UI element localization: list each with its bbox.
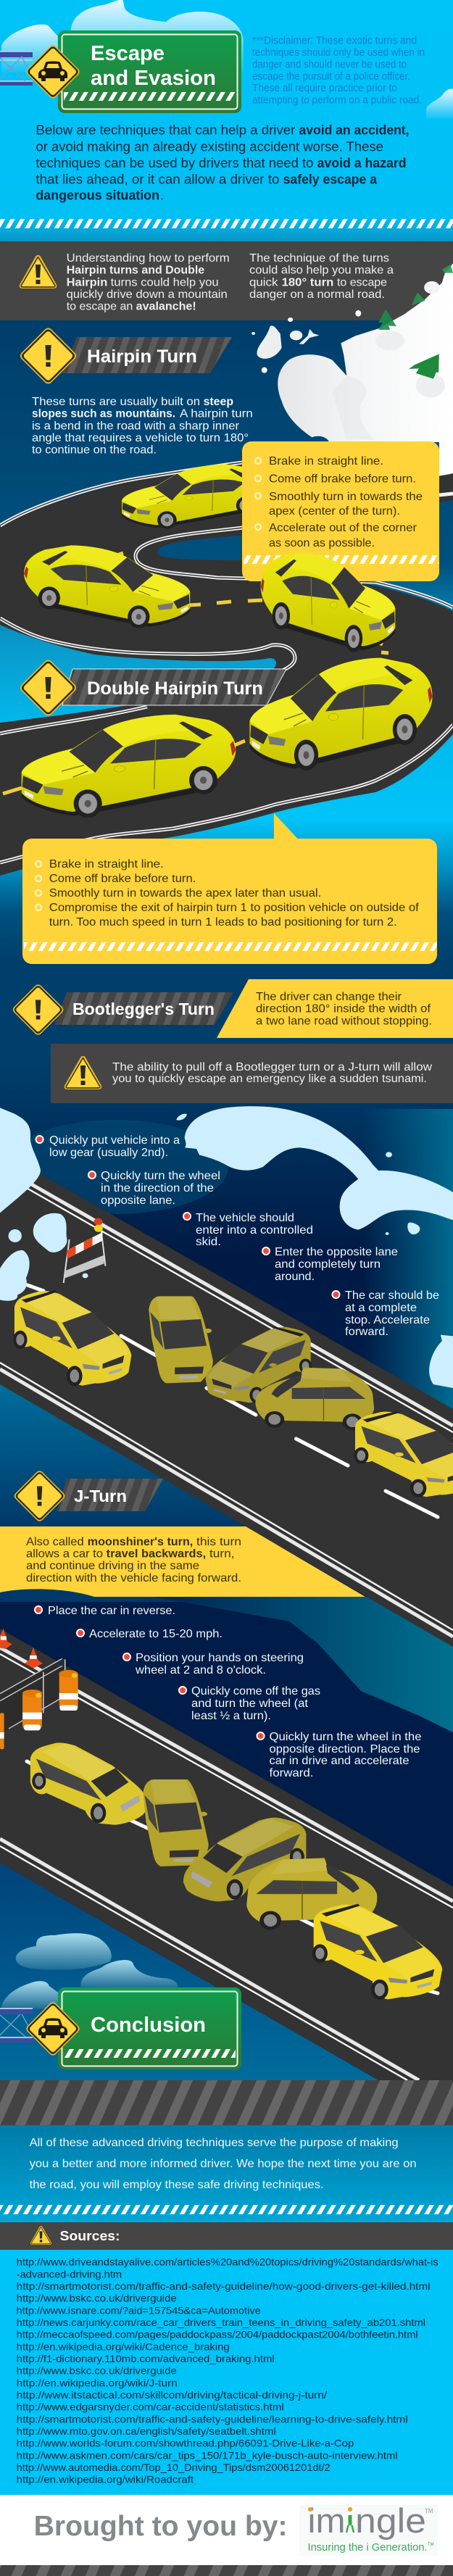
icon: car road sign (25, 2000, 81, 2057)
icon: cones, barrels and gate (0, 1629, 78, 1749)
car: step 1 (13, 1290, 131, 1386)
intro paragraph: or avoid making an already existing accident worse. These (36, 138, 383, 154)
car: lower-left sedan on hairpin (24, 545, 190, 628)
hairpin gap two (0, 625, 276, 723)
heading: Sources: Sources: (59, 2229, 120, 2243)
car: step 3 (183, 1818, 306, 1901)
intro paragraph: Below are techniques that can help a driver (36, 122, 295, 138)
heading: J-Turn: J-Turn (74, 1487, 127, 1505)
intro paragraph (36, 122, 409, 203)
callout: hairpin steps: Accelerate out of the corner (269, 522, 417, 534)
hairpin background (0, 320, 453, 964)
steps: J-turn (35, 1605, 422, 1779)
car: step 2 (149, 1296, 213, 1383)
steps: J-turn: Quickly turn the wheel in the (270, 1731, 422, 1743)
panel: sources list: http://en.wikipedia.org/wiki/J-turn (17, 2377, 178, 2388)
panel: sources list: http://www.isnare.com/?aid=157545&ca=Automotive (17, 2304, 261, 2316)
text: hairpin description: steep (204, 396, 233, 408)
callout: J-turn description: allows a car to (26, 1548, 103, 1560)
callout: J-turn description: this turn (196, 1536, 241, 1548)
disclaimer text (252, 36, 425, 107)
panel: avalanche warning: to escape an (67, 301, 133, 313)
steps: bootlegger turn: low gear (usually 2nd). (49, 1147, 168, 1159)
icon: warning diamond (13, 1469, 67, 1523)
panel: sources list: http://www.driveandstayalive.com/articles%20and%20topics/driving%20standards/what-is (17, 2256, 439, 2268)
callout: J-turn description: moonshiner's turn, (88, 1536, 193, 1548)
title sign: Conclusion: Conclusion (91, 2014, 206, 2037)
panel: sources list: http://meccaofspeed.com/pages/paddockpass/2004/paddockpast2004/bothfeetin.html (17, 2329, 418, 2340)
callout: double hairpin steps: Smoothly turn in towards the apex later than usual. (49, 887, 321, 899)
icon: conclusion gantry struts (0, 2008, 33, 2043)
footer: brought to you by (0, 2495, 453, 2565)
heading: Hairpin Turn (18, 326, 232, 386)
text: hairpin description: to continue on the road. (32, 444, 157, 457)
disclaimer text: escape the pursuit of a police officer. (252, 71, 410, 83)
intro paragraph: safely escape a (283, 171, 378, 186)
panel: avalanche warning: danger on a normal road. (249, 288, 385, 301)
intro paragraph: . (160, 188, 164, 203)
logo: imingle: im (307, 2501, 345, 2540)
heading: J-Turn (13, 1469, 163, 1523)
panel: avalanche warning: Hairpin turns and Double (67, 265, 204, 277)
intro paragraph: dangerous situation (36, 188, 159, 203)
panel: avalanche warning: could also help you make a (249, 265, 394, 277)
callout: hairpin steps: as soon as possible. (269, 537, 375, 549)
title sign: Escape and Evasion: and Evasion (91, 67, 216, 90)
steps: J-turn: least ½ a turn). (191, 1710, 271, 1722)
steps: bootlegger turn: forward. (345, 1326, 388, 1338)
logo: imingle (299, 2501, 438, 2556)
panel: sources list: http://www.mto.gov.on.ca/english/safety/seatbelt.shtml (17, 2425, 276, 2437)
title sign: Conclusion (58, 1987, 241, 2070)
icon: warning triangle (30, 2226, 51, 2245)
disclaimer text: danger and should never be used to (252, 59, 407, 70)
title sign: Escape and Evasion (58, 30, 241, 113)
steps: J-turn: Quickly come off the gas (191, 1685, 320, 1698)
panel: sources list: http://www.askmen.com/cars/car_tips_150/171b_kyle-busch-auto-interview.html (17, 2449, 398, 2461)
title sign: Escape and Evasion: Escape (91, 42, 165, 65)
text: hairpin description: slopes such as mountains. (32, 408, 175, 420)
icon: car road sign (25, 43, 81, 100)
text: hairpin description: A hairpin turn (180, 408, 253, 420)
steps: bootlegger turn: The vehicle should (196, 1212, 294, 1224)
callout: double hairpin steps (22, 813, 437, 964)
panel: sources list: http://en.wikipedia.org/wiki/Roadcraft (17, 2474, 194, 2485)
icon: warning triangle (20, 255, 57, 288)
steps: J-turn: car in drive and accelerate (270, 1755, 410, 1767)
steps: J-turn: Accelerate to 15-20 mph. (89, 1628, 223, 1640)
steps: J-turn: and turn the wheel (at (191, 1698, 309, 1710)
steps: bootlegger turn: enter into a controlled (196, 1224, 313, 1237)
disclaimer text: ***Disclaimer: These exotic turns and (252, 36, 417, 47)
callout: bootlegger description (217, 979, 453, 1038)
logo: imingle: TM (428, 2543, 434, 2547)
callout: J-turn description: travel backwards, (107, 1548, 206, 1560)
disclaimer text: These all require practice prior to (252, 83, 397, 94)
car: step 4 (246, 1858, 377, 1930)
panel: sources list: http://www.edgarsnyder.com/car-accident/statistics.html (17, 2401, 284, 2413)
steps: bootlegger turn: opposite lane. (101, 1194, 175, 1207)
car: sedan right of double hairpin (249, 658, 433, 770)
callout: hairpin steps: Come off brake before turn. (269, 473, 416, 486)
callout: J-turn description: and continue driving in the same (26, 1560, 199, 1572)
panel: avalanche warning: to escape (337, 276, 387, 288)
steps: J-turn: opposite direction. Place the (270, 1743, 420, 1756)
heading: Sources (0, 2222, 453, 2250)
callout: bootlegger description: direction 180° inside the width of (256, 1003, 431, 1015)
steps: bootlegger turn: Quickly turn the wheel (101, 1170, 220, 1182)
panel: sources list: http://www.itstactical.com/skillcom/driving/tactical-driving-j-turn/ (17, 2389, 327, 2401)
panel: conclusion text: you a better and more informed driver. We hope the next time you are on (30, 2158, 417, 2170)
clouds behind title sign (1, 0, 453, 118)
panel: sources list: http://www.worlds-forum.com/showthread.php/66091-Drive-Like-a-Cop (17, 2438, 354, 2449)
callout: J-turn description: turn, (209, 1548, 235, 1560)
callout: double hairpin steps: turn. Too much speed in turn 1 leads to bad positioning for turn 2. (49, 916, 397, 928)
steps: bootlegger turn: at a complete (345, 1302, 417, 1314)
panel: avalanche warning: quick (249, 276, 278, 288)
illustration: bootlegger road (0, 1151, 453, 1647)
panel: sources list: http://www.bskc.co.uk/driverguide (17, 2365, 177, 2377)
illustration: winding hairpin road (0, 458, 453, 876)
panel: avalanche warning: quickly drive down a mountain (67, 288, 228, 301)
callout: double hairpin steps: Come off brake before turn. (49, 873, 196, 885)
panel: avalanche warning: 180° turn (282, 276, 333, 288)
callout: hairpin steps (242, 441, 439, 581)
disclaimer text: attempting to perform on a public road. (252, 94, 422, 106)
panel: conclusion text (0, 2125, 453, 2222)
panel: avalanche warning (0, 241, 453, 321)
panel: tsunami warning: The ability to pull off a Bootlegger turn or a J-turn will allow (112, 1061, 432, 1073)
panel: conclusion text: All of these advanced driving techniques serve the purpose of making (30, 2137, 399, 2149)
panel: sources list: http://smartmotorist.com/traffic-and-safety-guideline/how-good-drivers-get-killed.html (17, 2280, 431, 2292)
clouds behind conclusion sign (1, 1933, 178, 2009)
section background: intro sky (0, 0, 453, 241)
intro paragraph: techniques can be used by drivers that need to (36, 155, 313, 170)
logo: imingle: ngle (355, 2501, 426, 2540)
disclaimer text: techniques should only be used when in (252, 47, 425, 59)
hairpin gap one (157, 500, 453, 611)
callout: J-turn description: direction with the vehicle facing forward. (26, 1572, 241, 1584)
text: hairpin description: is a bend in the road with a sharp inner (32, 420, 240, 432)
panel: sources list: http://news.carjunky.com/race_car_drivers_train_teens_in_driving_safety_ab201.shtml (17, 2317, 425, 2328)
illustration: J-turn road (0, 1629, 453, 2080)
panel: avalanche warning: Hairpin (67, 276, 107, 288)
panel: tsunami warning (51, 1044, 453, 1103)
panel: conclusion text: the road, you will employ these safe driving techniques. (30, 2179, 324, 2191)
logo: imingle: Insuring the i Generation. (307, 2541, 428, 2554)
callout: bootlegger description: The driver can change their (256, 991, 402, 1003)
steps: J-turn: wheel at 2 and 8 o'clock. (135, 1664, 266, 1677)
panel: sources list: http://en.wikipedia.org/wiki/Cadence_braking (17, 2340, 230, 2352)
panel: avalanche warning: The technique of the turns (249, 252, 389, 265)
heading: Double Hairpin Turn (18, 658, 286, 718)
cars: J-turn sequence (30, 1742, 442, 2000)
icon: warning diamond (18, 326, 78, 386)
text: hairpin description: These turns are usually built on (32, 396, 200, 408)
car: step 4 (255, 1368, 374, 1430)
steps: bootlegger turn: around. (275, 1271, 315, 1283)
car: upper sedan on hairpin (122, 465, 268, 529)
heading: Bootlegger's Turn: Bootlegger's Turn (72, 1000, 215, 1018)
intro paragraph: that lies ahead, or it can allow a driver to (36, 171, 279, 186)
intro paragraph: avoid a hazard (317, 155, 407, 170)
panel: sources list: http://smartmotorist.com/traffic-and-safety-guideline/learning-to-drive-safely.html (17, 2413, 408, 2425)
callout: bootlegger description: a two lane road without stopping. (256, 1015, 432, 1027)
icon: warning diamond (18, 658, 78, 718)
car: sedan overlapping callout (261, 552, 395, 652)
callout: J-turn description (0, 1526, 365, 1597)
panel: tsunami warning: you to quickly escape an emergency like a sudden tsunami. (112, 1073, 427, 1085)
heading: Bootlegger's Turn (12, 983, 233, 1036)
heading: Double Hairpin Turn: Double Hairpin Turn (87, 678, 263, 699)
panel: sources list: -advanced-driving.htm (17, 2268, 122, 2280)
panel: sources list (0, 2250, 453, 2495)
icon: warning triangle (65, 1056, 101, 1089)
steps: bootlegger turn: The car should be (345, 1289, 439, 1302)
steps: bootlegger turn: Enter the opposite lane (275, 1246, 398, 1258)
steps: J-turn: Place the car in reverse. (48, 1605, 175, 1617)
car: step 1 (30, 1742, 147, 1825)
steps: bootlegger turn: and completely turn (275, 1258, 381, 1271)
panel: sources list: http://www.bskc.co.uk/driverguide (17, 2293, 177, 2304)
intro paragraph: avoid an accident, (299, 122, 409, 138)
car: step 3 (205, 1326, 312, 1403)
footer: brought to you by: Brought to you by: (34, 2511, 288, 2542)
steps: bootlegger turn: Quickly put vehicle into a (49, 1134, 180, 1147)
panel: avalanche warning: turns could help you (111, 276, 219, 288)
cars: bootlegger turn sequence (13, 1290, 453, 1497)
steps: bootlegger turn: stop. Accelerate (345, 1314, 430, 1326)
steps: J-turn: forward. (270, 1767, 313, 1779)
callout: hairpin steps: Smoothly turn in towards the (269, 491, 423, 503)
panel: sources list: http://www.automedia.com/Top_10_Driving_Tips/dsm20061201dt/2 (17, 2461, 331, 2473)
steps: bootlegger turn (36, 1134, 439, 1338)
tsunami background (0, 964, 453, 2080)
panel: sources list: http://f1-dictionary.110mb.com/advanced_braking.html (17, 2353, 275, 2364)
callout: J-turn description: Also called (26, 1536, 84, 1548)
callout: hairpin steps: Brake in straight line. (269, 455, 383, 468)
icon: road barricade (64, 1218, 105, 1283)
heading: Hairpin Turn: Hairpin Turn (87, 346, 197, 367)
car: sedan centre of double hairpin (22, 715, 236, 818)
callout: double hairpin steps: Brake in straight line. (49, 858, 164, 871)
car: step 2 (143, 1779, 209, 1866)
panel: avalanche warning: Understanding how to perform (67, 252, 230, 265)
steps: J-turn: Position your hands on steering (136, 1652, 304, 1664)
text: hairpin description: angle that requires a vehicle to turn 180° (32, 432, 249, 444)
callout: double hairpin steps: Compromise the exit of hairpin turn 1 to position vehicle on outside of (49, 902, 419, 914)
illustration: avalanche snow and trees (252, 263, 453, 476)
steps: bootlegger turn: in the direction of the (101, 1182, 214, 1194)
panel: avalanche warning: avalanche! (136, 301, 196, 313)
illustration: tsunami waves (0, 1106, 453, 1388)
callout: hairpin steps: apex (center of the turn). (269, 505, 400, 518)
logo: imingle: TM (425, 2508, 433, 2514)
car: step 5 (354, 1411, 453, 1497)
icon: metal gantry struts (0, 51, 33, 86)
car: step 5 (312, 1904, 442, 2000)
steps: bootlegger turn: skid. (196, 1236, 221, 1248)
text: hairpin description (32, 396, 253, 457)
icon: warning diamond (12, 983, 65, 1036)
